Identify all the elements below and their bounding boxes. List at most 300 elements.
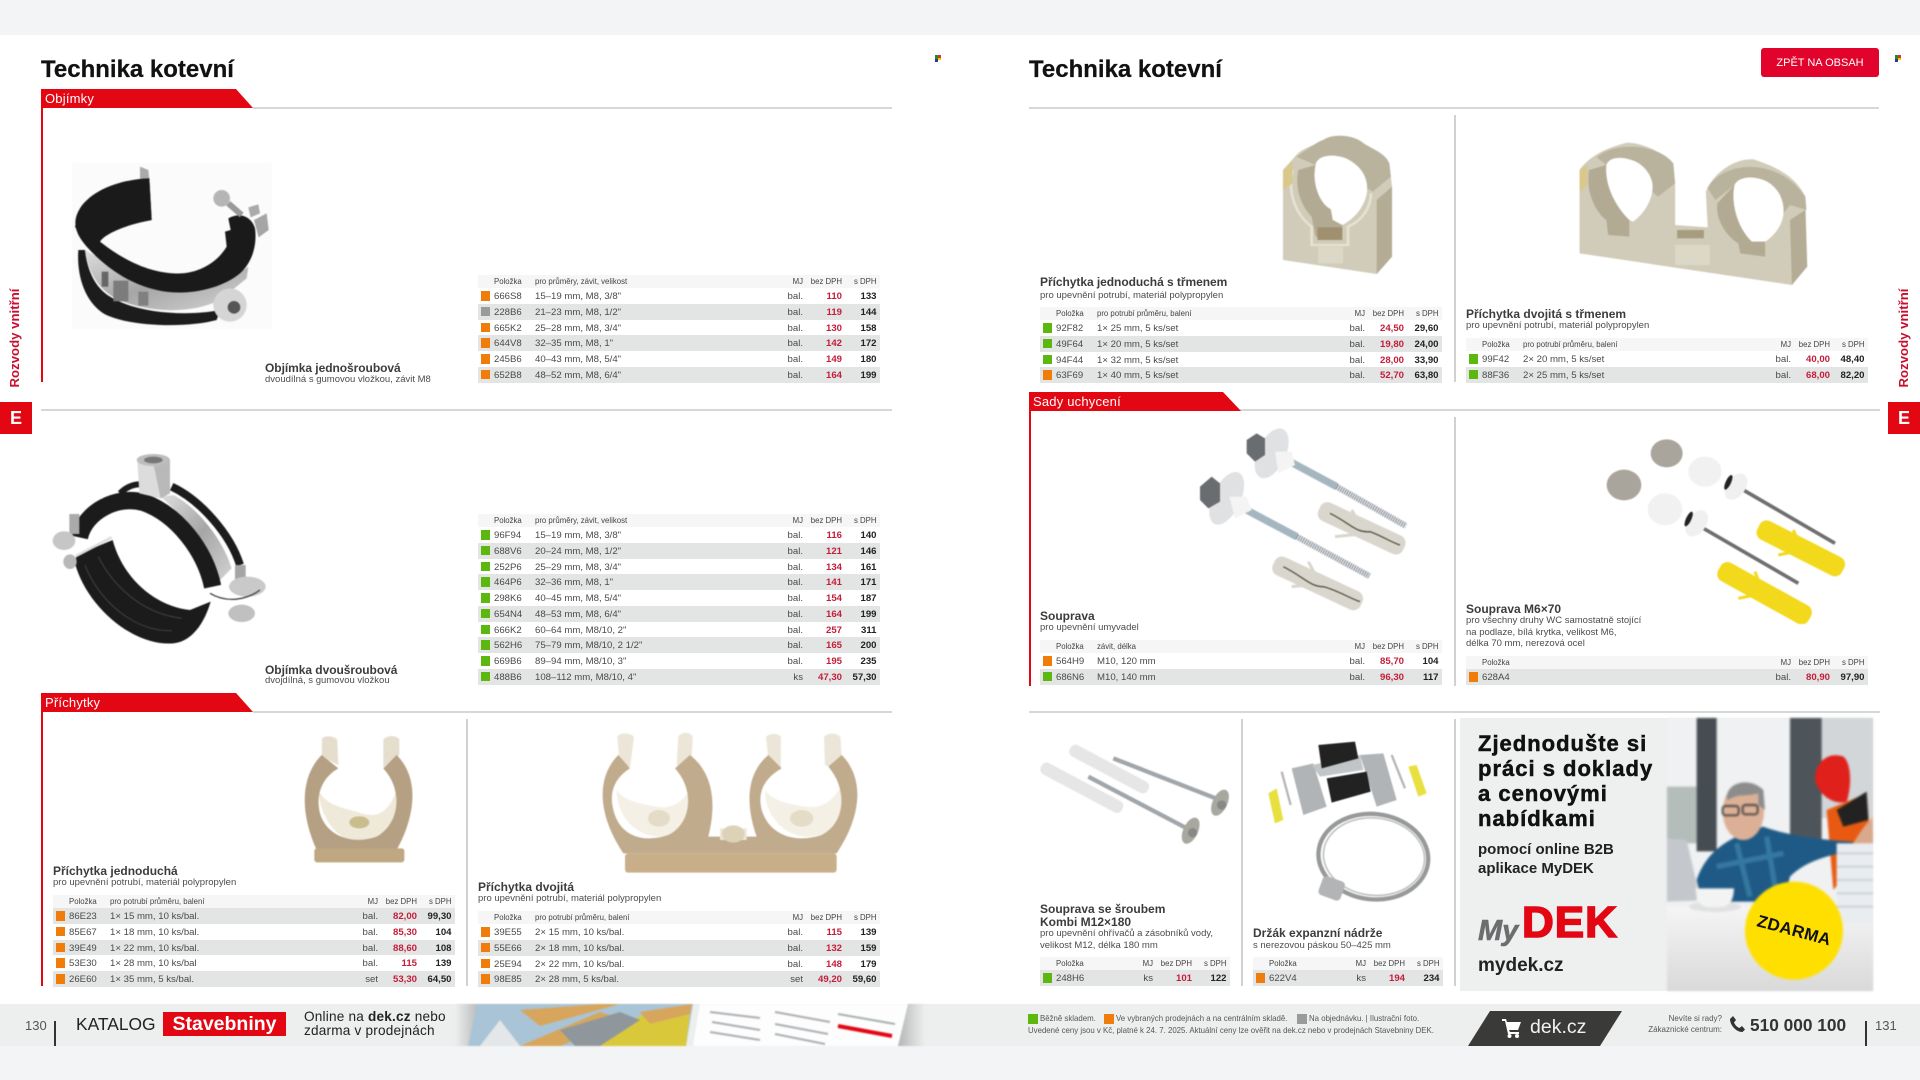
table: Objímka dvoušroubová: pro průměry, závit, velikost	[535, 516, 627, 525]
table: Souprava Kombi: 122	[1210, 973, 1226, 984]
table: Příchytka jednoduchá: 115	[402, 958, 417, 969]
table: Objímka dvoušroubová: 161	[860, 562, 876, 572]
logo: MyDEK: DEK	[1522, 898, 1618, 947]
table: Objímka dvoušroubová: 669B6	[494, 656, 522, 667]
table: Objímka jednošroubová: 644V8	[494, 338, 522, 349]
table: Objímka dvoušroubová: 140	[860, 530, 876, 541]
table: Objímka dvoušroubová: Položka	[494, 516, 522, 525]
table: Příchytka jednoduchá: 1× 15 mm, 10 ks/bal.	[110, 911, 199, 922]
table: Příchytka jednoduchá: bal.	[363, 958, 378, 969]
table: Příchytka jednoduchá s třmenem: bal.	[1350, 370, 1365, 381]
table: Příchytka dvojitá s třmenem: 68,00	[1806, 370, 1830, 381]
footer: right page	[1028, 1011, 1897, 1046]
section tab: Sady uchycení	[1029, 392, 1241, 411]
table: Objímka dvoušroubová: 195	[826, 656, 842, 667]
table: Objímka dvoušroubová: 48–53 mm, M8, 6/4"	[535, 609, 621, 620]
heading: advert: a cenovými	[1478, 781, 1608, 806]
table: Objímka jednošroubová: bal.	[788, 307, 803, 318]
table: Objímka dvoušroubová: 488B6	[494, 672, 522, 683]
table: Příchytka dvojitá: 132	[826, 943, 842, 954]
table: Příchytka jednoduchá s třmenem: bal.	[1350, 354, 1365, 366]
text: online offer	[304, 1010, 446, 1039]
table: Příchytka jednoduchá s třmenem: 49F64	[1056, 339, 1083, 350]
table: Objímka jednošroubová: pro průměry, závit, velikost	[535, 277, 627, 286]
table: Objímka dvoušroubová: 96F94	[494, 530, 521, 541]
table: Držák: MJ	[1356, 959, 1366, 968]
table: Příchytka jednoduchá	[53, 895, 455, 987]
table: Souprava M6×70: 97,90	[1840, 672, 1864, 683]
text: customer centre: Zákaznické centrum:	[1648, 1024, 1722, 1034]
table: Příchytka jednoduchá: bal.	[363, 927, 378, 938]
table: Příchytka dvojitá s třmenem: pro potrubí průměru, balení	[1523, 340, 1617, 349]
table: Příchytka jednoduchá: 82,00	[393, 911, 417, 922]
table: Objímka jednošroubová: 144	[860, 307, 876, 318]
table: Objímka jednošroubová: 15–19 mm, M8, 3/8"	[535, 291, 621, 302]
table: Příchytka jednoduchá s třmenem: 1× 20 mm, 5 ks/set	[1097, 339, 1178, 350]
table: Objímka dvoušroubová: 25–29 mm, M8, 3/4"	[535, 562, 621, 572]
table: Příchytka jednoduchá s třmenem: Položka	[1056, 309, 1084, 318]
table: Souprava Kombi: 101	[1176, 973, 1192, 984]
table: Souprava: 104	[1422, 656, 1438, 667]
section tab: Příchytky	[41, 693, 253, 712]
description: délka 70 mm, nerezová ocel	[1466, 638, 1585, 649]
table: Příchytka dvojitá: MJ	[793, 913, 803, 922]
table: Držák: 234	[1423, 973, 1440, 984]
heading: advert	[1478, 731, 1653, 831]
table: Příchytka jednoduchá s třmenem: 92F82	[1056, 323, 1083, 334]
table: Příchytka jednoduchá: set	[365, 974, 378, 985]
table: Souprava M6×70: 80,90	[1806, 672, 1830, 683]
table: Příchytka jednoduchá: pro potrubí průměru, balení	[110, 897, 204, 906]
table: Příchytka dvojitá: 39E55	[494, 927, 522, 938]
table: Objímka jednošroubová: 21–23 mm, M8, 1/2"	[535, 307, 621, 318]
description: dvojdílná, s gumovou vložkou	[265, 675, 390, 686]
table: Objímka jednošroubová: MJ	[793, 277, 803, 286]
heading: Souprava se šroubem	[1040, 902, 1165, 916]
table: Příchytka jednoduchá: 139	[435, 958, 452, 969]
footer: left page	[25, 1003, 922, 1047]
heading: Objímka dvoušroubová	[265, 663, 397, 677]
table: Příchytka dvojitá: 59,60	[852, 974, 876, 985]
table: Objímka dvoušroubová: 146	[860, 546, 876, 557]
description	[1040, 928, 1213, 950]
table: Objímka jednošroubová: 32–35 mm, M8, 1"	[535, 338, 613, 349]
table: Souprava M6×70: MJ	[1781, 658, 1791, 667]
table: Objímka dvoušroubová: bal.	[788, 546, 803, 557]
table: Příchytka dvojitá: 25E94	[494, 958, 522, 970]
table: Držák	[1253, 957, 1443, 986]
heading: Souprava M6×70	[1466, 602, 1561, 616]
table: Objímka dvoušroubová: 171	[860, 577, 876, 588]
table: Držák: 622V4	[1269, 973, 1297, 984]
page number: 131	[1875, 1018, 1897, 1033]
table: Příchytka dvojitá: 115	[827, 927, 842, 938]
table: Objímka dvoušroubová: bal.	[788, 624, 803, 636]
table: Příchytka dvojitá: 148	[826, 958, 842, 970]
table: Souprava M6×70: bal.	[1776, 672, 1791, 683]
heading: advert: práci s doklady	[1478, 756, 1653, 781]
badge: ZDARMA: ZDARMA	[1755, 911, 1833, 950]
table: Příchytka dvojitá: s DPH	[854, 913, 876, 922]
table: Objímka dvoušroubová: 200	[860, 640, 876, 651]
table: Příchytka jednoduchá s třmenem: 1× 32 mm, 5 ks/set	[1097, 354, 1178, 366]
button: back to contents	[1761, 48, 1879, 77]
table: Příchytka dvojitá: bal.	[788, 943, 803, 954]
panel: Souprava M6×70	[1466, 438, 1868, 685]
table: Souprava: M10, 140 mm	[1097, 672, 1156, 683]
title: left page: Technika kotevní	[41, 56, 234, 83]
table: Příchytka jednoduchá s třmenem: 28,00	[1380, 354, 1404, 366]
table: Souprava Kombi: MJ	[1143, 959, 1153, 968]
image: expansion tank holder	[1268, 740, 1431, 902]
table: Objímka jednošroubová: bez DPH	[811, 277, 842, 286]
heading: Držák expanzní nádrže	[1253, 926, 1382, 940]
phone number: 510 000 100	[1750, 1015, 1846, 1035]
icon: right colour mark	[1895, 55, 1901, 62]
table: Objímka dvoušroubová: bez DPH	[811, 516, 842, 525]
table: Souprava M6×70: 628A4	[1482, 672, 1510, 683]
table: Příchytka jednoduchá: 1× 35 mm, 5 ks/bal.	[110, 974, 194, 985]
table: Souprava: 85,70	[1380, 656, 1404, 667]
table: Příchytka jednoduchá s třmenem: 63F69	[1056, 370, 1083, 381]
side label: right: Rozvody vnitřní	[1896, 289, 1911, 387]
table: Příchytka dvojitá s třmenem: 88F36	[1482, 370, 1509, 381]
table: Souprava: 686N6	[1056, 672, 1084, 683]
link: mydek.cz: mydek.cz	[1478, 955, 1564, 976]
table: Držák: Položka	[1269, 959, 1297, 968]
table: Objímka dvoušroubová: ks	[793, 672, 803, 683]
description: s nerezovou páskou 50–425 mm	[1253, 940, 1391, 951]
table: Objímka dvoušroubová: 311	[861, 624, 876, 636]
table: Souprava	[1040, 640, 1442, 685]
table: Objímka dvoušroubová: 134	[826, 562, 842, 572]
text: customer centre: Nevíte si rady?	[1669, 1014, 1722, 1023]
table: Příchytka dvojitá: Položka	[494, 913, 522, 922]
image: single pipe clip	[304, 736, 414, 863]
table: Příchytka jednoduchá s třmenem: 1× 25 mm, 5 ks/set	[1097, 323, 1178, 334]
heading: Kombi M12×180	[1040, 915, 1131, 929]
subheading: advert	[1478, 841, 1614, 876]
image: single-screw clamp	[74, 166, 270, 326]
table: Souprava M6×70: bez DPH	[1799, 658, 1830, 667]
table: Příchytka dvojitá: bal.	[788, 927, 803, 938]
table: Příchytka jednoduchá: bal.	[363, 942, 378, 954]
image: WC fixing set	[1606, 438, 1846, 625]
table: Souprava: MJ	[1355, 642, 1365, 651]
table: Objímka dvoušroubová: 40–45 mm, M8, 5/4"	[535, 593, 621, 604]
table: Objímka jednošroubová: 164	[826, 370, 842, 381]
description: pro upevnění potrubí, materiál polypropylen	[53, 877, 236, 888]
table: Objímka dvoušroubová: 60–64 mm, M8/10, 2"	[535, 624, 626, 636]
table: Souprava Kombi: s DPH	[1204, 959, 1226, 968]
table: Držák: 194	[1389, 973, 1405, 984]
table: Příchytka dvojitá s třmenem: s DPH	[1842, 340, 1864, 349]
table: Příchytka jednoduchá: MJ	[368, 897, 378, 906]
table: Příchytka jednoduchá: 99,30	[427, 911, 452, 922]
section tab: Sady uchycení: Sady uchycení	[1033, 394, 1121, 409]
table: Příchytka jednoduchá: 39E49	[69, 942, 97, 954]
table: Objímka dvoušroubová: 116	[827, 530, 842, 541]
image: double pipe clip	[602, 732, 858, 874]
button: back to contents: ZPĚT NA OBSAH	[1776, 57, 1864, 69]
table: Příchytka dvojitá: set	[790, 974, 803, 985]
table: Příchytka jednoduchá: 85,30	[393, 927, 417, 938]
heading: Příchytka dvojitá	[478, 880, 574, 894]
table: Příchytka jednoduchá: 53E30	[69, 958, 97, 969]
table: Souprava: 564H9	[1056, 656, 1084, 667]
description: pro upevnění umyvadel	[1040, 622, 1139, 633]
text: online offer: zdarma v prodejnách	[304, 1023, 435, 1038]
table: Objímka dvoušroubová: bal.	[788, 609, 803, 620]
table: Objímka dvoušroubová: 464P6	[494, 577, 522, 588]
table: Objímka dvoušroubová: bal.	[788, 593, 803, 604]
section tab: Objímky: Objímky	[45, 91, 94, 106]
subheading: advert: aplikace MyDEK	[1478, 860, 1594, 876]
image: washbasin screw set	[1199, 428, 1408, 611]
table: Příchytka jednoduchá s třmenem: 52,70	[1380, 370, 1404, 381]
description: pro upevnění potrubí, materiál polypropylen	[1040, 290, 1223, 300]
table: Příchytka jednoduchá: bez DPH	[386, 897, 417, 906]
badge: Stavebniny: Stavebniny	[172, 1013, 277, 1035]
table: Držák: s DPH	[1417, 959, 1440, 968]
table: Příchytka dvojitá: 179	[860, 958, 876, 970]
table: Příchytka jednoduchá s třmenem: s DPH	[1416, 309, 1438, 318]
table: Souprava: M10, 120 mm	[1097, 656, 1156, 667]
description: pro upevnění ohřívačů a zásobníků vody,	[1040, 928, 1213, 939]
table: Objímka dvoušroubová: 199	[860, 609, 876, 620]
table: Příchytka dvojitá s třmenem: bal.	[1776, 370, 1791, 381]
table: Příchytka jednoduchá s třmenem: bal.	[1350, 323, 1365, 334]
table: Objímka jednošroubová	[478, 275, 880, 383]
subheading: advert: pomocí online B2B	[1478, 841, 1614, 858]
table: Objímka dvoušroubová: bal.	[788, 577, 803, 588]
icon: phone	[1730, 1016, 1745, 1032]
table: Objímka jednošroubová: 130	[826, 322, 842, 334]
table: Příchytka dvojitá: 2× 22 mm, 10 ks/bal.	[535, 958, 624, 970]
table: Objímka jednošroubová: 180	[860, 354, 876, 365]
heading: Objímka jednošroubová	[265, 361, 401, 375]
heading: advert: nabídkami	[1478, 806, 1596, 831]
side tab: left E: E	[10, 408, 22, 428]
table: Objímka dvoušroubová: 57,30	[852, 672, 876, 683]
table: Držák: bez DPH	[1374, 959, 1405, 968]
table: Příchytka jednoduchá s třmenem: 94F44	[1056, 354, 1083, 366]
heading: Příchytka jednoduchá	[53, 864, 178, 878]
table: Příchytka dvojitá	[478, 911, 880, 987]
table: Objímka jednošroubová: s DPH	[854, 277, 876, 286]
section tab: Objímky	[41, 89, 253, 108]
table: Příchytka dvojitá s třmenem: 82,20	[1840, 370, 1864, 381]
table: Objímka dvoušroubová: 164	[826, 609, 842, 620]
text: online offer: Online na dek.cz nebo	[304, 1009, 446, 1024]
table: Příchytka jednoduchá: 1× 22 mm, 10 ks/bal.	[110, 942, 199, 954]
heading: advert: Zjednodušte si	[1478, 731, 1647, 756]
table: Objímka dvoušroubová: s DPH	[854, 516, 876, 525]
table: Příchytka dvojitá: 159	[860, 943, 876, 954]
image: double-screw clamp	[52, 454, 266, 644]
table: Příchytka jednoduchá s třmenem	[1040, 307, 1442, 383]
description: pro upevnění potrubí, materiál polypropylen	[478, 892, 661, 904]
table: Příchytka dvojitá s třmenem	[1466, 338, 1868, 383]
table: Objímka dvoušroubová: bal.	[788, 530, 803, 541]
table: Objímka dvoušroubová: 141	[826, 577, 842, 588]
icon: left colour mark	[935, 55, 941, 62]
table: Souprava: Položka	[1056, 642, 1084, 651]
table: Objímka jednošroubová: bal.	[788, 354, 803, 365]
table: Objímka dvoušroubová: 121	[826, 546, 842, 557]
table: Objímka jednošroubová: 48–52 mm, M8, 6/4"	[535, 370, 621, 381]
table: Souprava: bez DPH	[1373, 642, 1404, 651]
table: Objímka dvoušroubová: 75–79 mm, M8/10, 2 1/2"	[535, 640, 642, 651]
table: Příchytka dvojitá s třmenem: 40,00	[1806, 354, 1830, 365]
table: Objímka dvoušroubová: 15–19 mm, M8, 3/8"	[535, 530, 621, 541]
table: Souprava M6×70: s DPH	[1842, 658, 1864, 667]
table: Objímka dvoušroubová: 47,30	[818, 672, 842, 683]
table: Objímka jednošroubová: bal.	[788, 370, 803, 381]
table: Objímka jednošroubová: 25–28 mm, M8, 3/4"	[535, 322, 621, 334]
table: Souprava Kombi: ks	[1143, 973, 1153, 984]
table: Objímka dvoušroubová: 20–24 mm, M8, 1/2"	[535, 546, 621, 557]
table: Objímka jednošroubová: 40–43 mm, M8, 5/4"	[535, 354, 621, 365]
heading: Souprava	[1040, 609, 1095, 623]
logo: MyDEK	[1478, 898, 1618, 947]
table: Příchytka dvojitá: bez DPH	[811, 913, 842, 922]
table: Objímka dvoušroubová: 89–94 mm, M8/10, 3"	[535, 656, 626, 667]
table: Držák: ks	[1356, 973, 1366, 984]
table: Příchytka dvojitá: 55E66	[494, 943, 522, 954]
panel: MyDEK advert	[1460, 718, 1873, 991]
image: single clip with bracket	[1282, 135, 1393, 274]
table: Příchytka dvojitá: bal.	[788, 958, 803, 970]
photo: man at laptop	[1666, 716, 1874, 992]
table: Příchytka jednoduchá s třmenem: 33,90	[1414, 354, 1438, 366]
panel: Příchytka dvojitá s třmenem	[1466, 142, 1868, 383]
table: Příchytka jednoduchá: 88,60	[393, 942, 417, 954]
table: Objímka jednošroubová: 158	[860, 322, 876, 334]
table: Příchytka dvojitá: 2× 15 mm, 10 ks/bal.	[535, 927, 624, 938]
legend: Uvedené ceny jsou v Kč, platné k 24. 7. 2025. Aktuální ceny lze ověřit na dek.cz nebo v prodejnách Stavebniny DEK.	[1028, 1026, 1434, 1035]
description: pro všechny druhy WC samostatně stojící	[1466, 615, 1641, 626]
table: Příchytka jednoduchá s třmenem: 19,80	[1380, 339, 1404, 350]
table: Objímka jednošroubová: 133	[860, 291, 876, 302]
table: Příchytka jednoduchá: bal.	[363, 911, 378, 922]
link: dek.cz: dek.cz	[1530, 1016, 1586, 1038]
table: Souprava M6×70	[1466, 656, 1868, 685]
table: Objímka jednošroubová: 245B6	[494, 354, 522, 365]
table: Příchytka jednoduchá: Položka	[69, 897, 97, 906]
table: Příchytka dvojitá: 2× 18 mm, 10 ks/bal.	[535, 943, 624, 954]
text: customer centre	[1648, 1014, 1722, 1035]
image: double clip with bracket	[1578, 142, 1808, 286]
legend: Na objednávku. | Ilustrační foto.	[1309, 1014, 1419, 1023]
table: Příchytka dvojitá: 139	[860, 927, 876, 938]
table: Souprava Kombi: bez DPH	[1161, 959, 1192, 968]
table: Objímka jednošroubová: bal.	[788, 322, 803, 334]
table: Objímka dvoušroubová: 165	[826, 640, 842, 651]
table: Příchytka jednoduchá: 1× 28 mm, 10 ks/bal	[110, 958, 197, 969]
table: Objímka dvoušroubová: 108–112 mm, M8/10, 4"	[535, 672, 636, 683]
side tab: left E	[0, 402, 32, 434]
table: Objímka jednošroubová: 149	[826, 354, 842, 365]
table: Souprava Kombi	[1040, 957, 1230, 986]
table: Příchytka dvojitá s třmenem: 48,40	[1840, 354, 1864, 365]
table: Příchytka jednoduchá s třmenem: 24,50	[1380, 323, 1404, 334]
table: Souprava: 117	[1423, 672, 1438, 683]
panel: Souprava se šroubem Kombi	[1040, 744, 1230, 986]
table: Příchytka jednoduchá s třmenem: bal.	[1350, 339, 1365, 350]
panel: Příchytka jednoduchá s třmenem	[1040, 135, 1442, 383]
table: Příchytka jednoduchá: 64,50	[427, 974, 452, 985]
heading: Příchytka jednoduchá s třmenem	[1040, 275, 1227, 289]
table: Objímka dvoušroubová: 666K2	[494, 624, 522, 636]
table: Příchytka jednoduchá s třmenem: MJ	[1355, 309, 1365, 318]
legend: Běžně skladem.	[1040, 1014, 1096, 1023]
table: Objímka jednošroubová: 666S8	[494, 291, 522, 302]
table: Příchytka jednoduchá: 85E67	[69, 927, 97, 938]
description: pro upevnění potrubí, materiál polypropylen	[1466, 320, 1649, 331]
legend: Ve vybraných prodejnách a na centrálním skladě.	[1116, 1014, 1287, 1023]
table: Příchytka jednoduchá s třmenem: 29,60	[1414, 323, 1438, 334]
table: Objímka dvoušroubová: 654N4	[494, 609, 522, 620]
table: Objímka jednošroubová: 228B6	[494, 307, 522, 318]
heading	[1040, 902, 1165, 929]
table: Objímka dvoušroubová: MJ	[793, 516, 803, 525]
table: Objímka jednošroubová: 199	[860, 370, 876, 381]
table: Souprava: závit, délka	[1097, 642, 1136, 651]
panel: Objímka dvoušroubová	[52, 454, 880, 686]
table: Objímka dvoušroubová: 154	[826, 593, 842, 604]
panel: Příchytka jednoduchá	[53, 736, 455, 987]
table: Příchytka jednoduchá s třmenem: pro potrubí průměru, balení	[1097, 309, 1191, 318]
table: Objímka jednošroubová: Položka	[494, 277, 522, 286]
table: Souprava Kombi: 248H6	[1056, 973, 1084, 984]
table: Příchytka jednoduchá s třmenem: bez DPH	[1373, 309, 1404, 318]
image: catalogue spread	[455, 1004, 925, 1046]
table: Objímka dvoušroubová: bal.	[788, 656, 803, 667]
description: dvoudílná s gumovou vložkou, závit M8	[265, 374, 431, 385]
table: Objímka jednošroubová: bal.	[788, 291, 803, 302]
table: Příchytka dvojitá: 49,20	[818, 974, 842, 985]
table: Příchytka dvojitá: 98E85	[494, 974, 522, 985]
panel: Příchytka dvojitá	[478, 732, 880, 987]
table: Objímka dvoušroubová: 235	[860, 656, 876, 667]
table: Příchytka dvojitá s třmenem: Položka	[1482, 340, 1510, 349]
table: Příchytka jednoduchá s třmenem: 63,80	[1414, 370, 1438, 381]
table: Příchytka jednoduchá: 108	[435, 942, 452, 954]
table: Příchytka dvojitá: pro potrubí průměru, balení	[535, 913, 629, 922]
table: Objímka dvoušroubová: bal.	[788, 562, 803, 572]
table: Objímka jednošroubová: 119	[827, 307, 842, 318]
badge: dek.cz	[1468, 1011, 1622, 1046]
image: Kombi screw set	[1040, 744, 1230, 844]
table: Objímka dvoušroubová: 562H6	[494, 640, 522, 651]
panel: Držák expanzní nádrže	[1253, 740, 1443, 986]
table: Příchytka dvojitá s třmenem: 99F42	[1482, 354, 1509, 365]
table: Souprava M6×70: Položka	[1482, 658, 1510, 667]
table: Objímka dvoušroubová	[478, 514, 880, 685]
side tab: right E	[1888, 402, 1920, 434]
table: Objímka jednošroubová: 665K2	[494, 322, 522, 334]
table: Objímka dvoušroubová: 252P6	[494, 562, 522, 572]
table: Objímka jednošroubová: 652B8	[494, 370, 522, 381]
description	[1466, 615, 1642, 649]
table: Objímka dvoušroubová: 298K6	[494, 593, 522, 604]
table: Objímka dvoušroubová: 32–36 mm, M8, 1"	[535, 577, 613, 588]
section tab: Příchytky: Příchytky	[45, 695, 100, 710]
table: Objímka dvoušroubová: 257	[826, 624, 842, 636]
table: Objímka jednošroubová: 142	[826, 338, 842, 349]
icon: cart	[1502, 1019, 1521, 1038]
